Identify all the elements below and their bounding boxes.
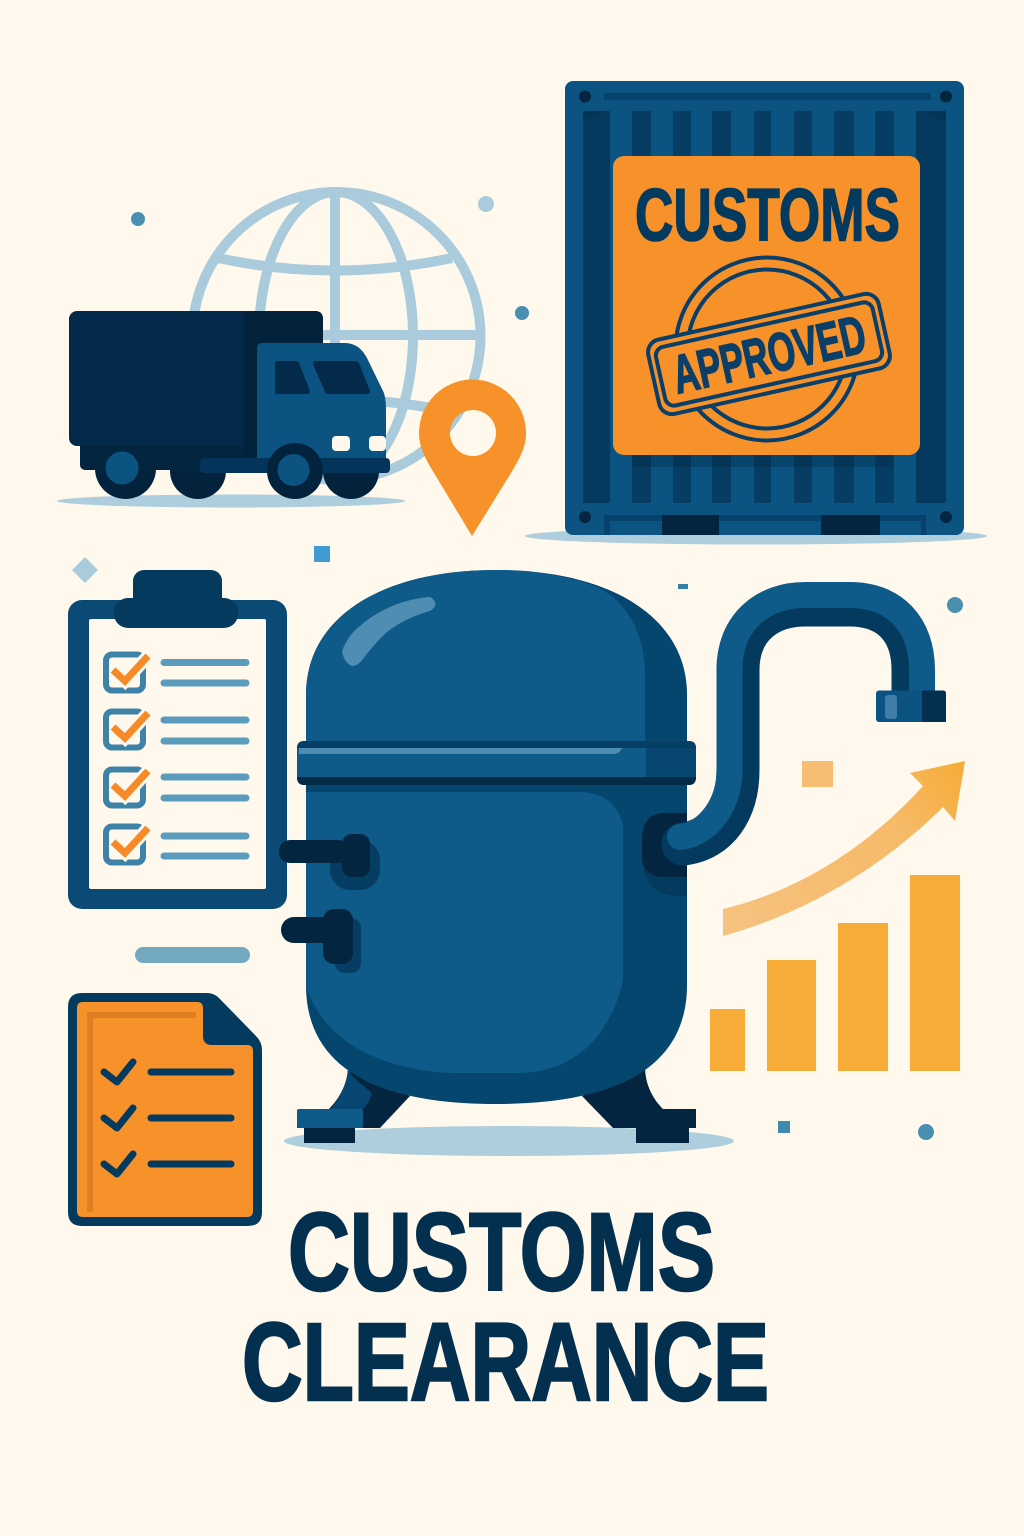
container bolts	[579, 90, 952, 523]
truck cab	[257, 343, 386, 460]
customs sign	[613, 156, 920, 455]
checklist row 3	[106, 770, 246, 806]
document lines	[151, 1072, 231, 1164]
panel: compressor	[279, 570, 946, 1143]
document inner fold	[87, 1012, 196, 1212]
clipboard clip	[114, 570, 238, 628]
compressor shadow	[284, 1126, 734, 1156]
truck chassis	[80, 440, 270, 470]
title: CLEARANCE	[242, 1301, 769, 1424]
checklist row 2	[106, 712, 246, 748]
compressor lower light area	[306, 792, 623, 1073]
discharge pipe	[680, 595, 922, 844]
icon: delivery truck	[69, 311, 390, 499]
document outline	[68, 993, 262, 1226]
panel: clipboard checklist	[68, 570, 287, 909]
compressor right port	[642, 813, 687, 896]
bar chart	[710, 875, 960, 1071]
compressor body	[306, 570, 687, 1104]
container corner shading	[583, 111, 946, 467]
container body	[565, 81, 964, 535]
title	[242, 1191, 769, 1424]
decorative dots and squares	[72, 196, 963, 1140]
compressor dome light area	[306, 570, 645, 745]
clipboard frame	[68, 600, 287, 909]
truck bumper	[200, 458, 390, 473]
compressor left foot	[297, 1066, 410, 1143]
pipe nut	[876, 690, 946, 722]
title: CUSTOMS	[288, 1191, 715, 1314]
truck windows	[275, 361, 370, 394]
icon: globe	[192, 192, 481, 480]
panel: shipping container	[565, 81, 964, 535]
document checks	[104, 1062, 133, 1174]
arrow: growth trend	[723, 761, 965, 936]
truck headlights	[332, 436, 386, 451]
sign heading: CUSTOMS	[635, 174, 900, 256]
checklist row 4	[106, 826, 246, 862]
compressor left terminals	[279, 834, 380, 973]
approved stamp	[646, 258, 892, 440]
document sheet	[77, 1002, 253, 1217]
panel: orange document	[68, 993, 262, 1226]
compressor right foot	[582, 1066, 696, 1143]
truck front wheels	[106, 443, 323, 499]
container corrugation	[583, 111, 946, 503]
container bottom rail	[604, 515, 926, 535]
compressor flange	[297, 741, 696, 791]
clipboard paper	[89, 619, 266, 889]
checklist row 1	[106, 654, 246, 690]
icon: orange location pin	[419, 379, 526, 536]
container ground shadow	[525, 528, 987, 544]
approved stamp: APPROVED	[667, 304, 871, 405]
container top bar	[604, 93, 931, 100]
compressor dome highlight	[342, 597, 435, 666]
truck ground shadow	[57, 494, 405, 508]
truck rear wheels	[95, 438, 379, 499]
truck cargo box	[69, 311, 323, 456]
label bar below clipboard	[135, 947, 250, 963]
